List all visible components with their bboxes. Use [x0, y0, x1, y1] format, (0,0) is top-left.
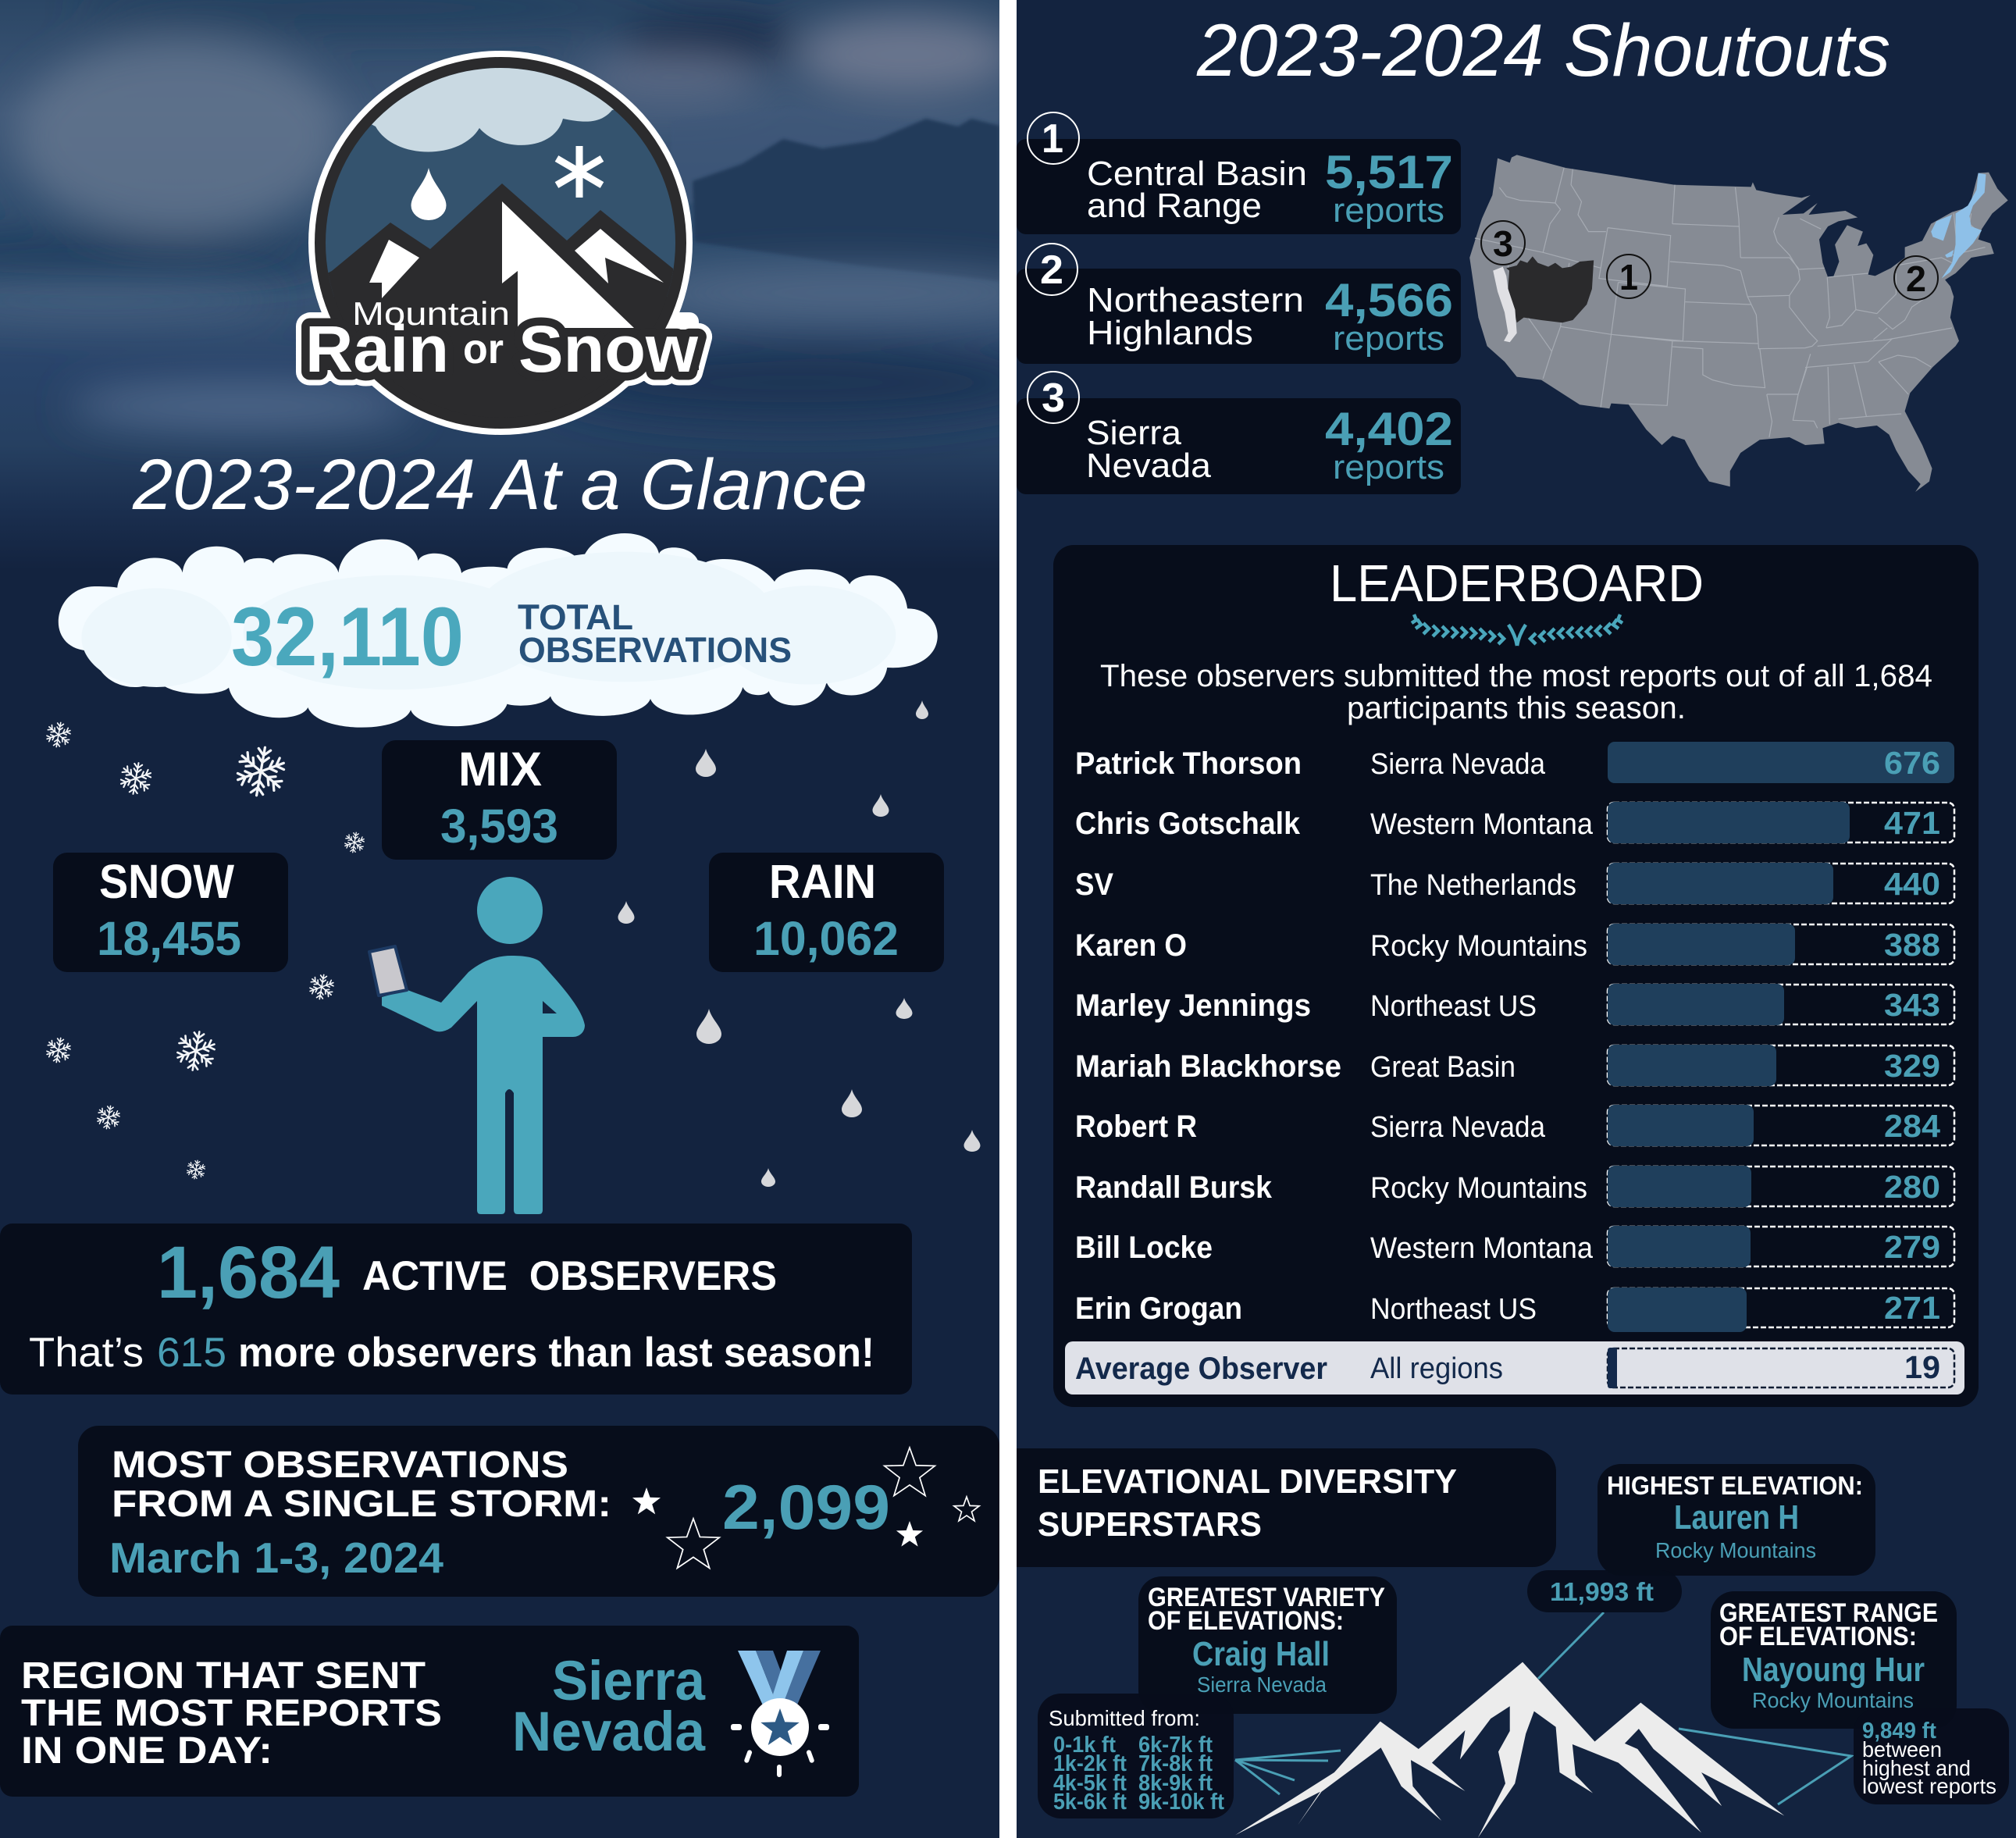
row: Erin Grogan: Erin Grogan — [1075, 1291, 1242, 1326]
callout: greatest variety of elevations — [1138, 1576, 1397, 1714]
stat box: snow — [53, 853, 288, 972]
shoutout 1: Central Basin and Range: reports — [1333, 191, 1444, 230]
shoutout 3: Sierra Nevada: reports — [1333, 448, 1444, 486]
row: Chris Gotschalk — [1075, 802, 1954, 843]
icon: observer with phone — [369, 877, 585, 1214]
logo: Mountain Rain or Snow: Snow — [518, 312, 699, 386]
row: Randall Bursk: Rocky Mountains — [1370, 1172, 1587, 1205]
region name: Nevada — [512, 1701, 705, 1763]
callout: greatest variety of elevations: Sierra Nevada — [1197, 1672, 1327, 1697]
shoutout 1: Central Basin and Range: Central Basin — [1087, 155, 1307, 193]
panel: region with most reports in one day — [0, 1626, 859, 1797]
logo: Mountain Rain or Snow: Rain — [305, 312, 449, 386]
callout: highest elevation: Rocky Mountains — [1655, 1538, 1816, 1562]
leaderboard heading: LEADERBOARD — [1330, 554, 1704, 613]
callout: greatest variety of elevations: GREATEST VARIETY — [1148, 1583, 1385, 1612]
icon: laurel — [1412, 614, 1622, 646]
callout: 11,993 ft: 11,993 ft — [1550, 1577, 1654, 1606]
icon: snowy mountain range — [1235, 1662, 1784, 1838]
callout: submitted from elevations: 1k-2k ft — [1053, 1751, 1127, 1776]
row: Randall Bursk — [1075, 1166, 1954, 1207]
total number: 32,110 — [231, 590, 464, 683]
row: Karen O: 388 — [1884, 927, 1940, 963]
region heading: THE MOST REPORTS — [21, 1693, 442, 1734]
callout: submitted from elevations: 0-1k ft — [1053, 1733, 1116, 1758]
storm heading — [112, 1444, 611, 1525]
stat box: mix — [382, 740, 617, 860]
map marker 3: 3 — [1493, 223, 1513, 264]
row: Robert R: 284 — [1884, 1108, 1940, 1144]
callout: 11,993 ft — [1527, 1570, 1682, 1612]
row: Karen O: Karen O — [1075, 928, 1187, 963]
snowflakes — [45, 721, 366, 1181]
row: Erin Grogan: Northeast US — [1370, 1293, 1537, 1326]
callout: submitted from elevations: 6k-7k ft — [1138, 1733, 1213, 1758]
stat box: rain — [709, 853, 944, 972]
callout: submitted from elevations: 7k-8k ft — [1138, 1751, 1213, 1776]
cloud: total observations — [59, 533, 938, 728]
callout: greatest range of elevations: Rocky Mountains — [1752, 1688, 1914, 1712]
right panel: shoutouts — [992, 0, 2016, 1838]
row: Average Observer — [1065, 1341, 1964, 1395]
row: Mariah Blackhorse — [1075, 1045, 1954, 1086]
total label: TOTAL — [518, 597, 633, 637]
panel: elevational diversity superstars: SUPERSTARS — [1038, 1505, 1262, 1544]
map marker 2: 2 — [1906, 258, 1926, 299]
row: Mariah Blackhorse: Great Basin — [1370, 1051, 1516, 1084]
map marker 1: 1 — [1619, 257, 1638, 297]
panel: active observers — [0, 1224, 912, 1395]
storm heading: MOST OBSERVATIONS — [112, 1444, 568, 1486]
callout: submitted from elevations: 9k-10k ft — [1138, 1790, 1224, 1815]
shoutout 2: Northeastern Highlands: reports — [1333, 319, 1444, 358]
row: Chris Gotschalk: 471 — [1884, 805, 1940, 841]
shoutout 2: Northeastern Highlands: Northeastern — [1087, 281, 1304, 319]
stat box: rain: RAIN — [769, 855, 876, 908]
stat box: mix: 3,593 — [440, 800, 558, 853]
row: SV: 440 — [1884, 866, 1940, 902]
row: Karen O — [1075, 924, 1954, 965]
callout: 9,849 ft: lowest reports — [1862, 1774, 1996, 1798]
map marker 1 — [1607, 255, 1651, 298]
panel: elevational diversity superstars: ELEVATIONAL DIVERSITY — [1038, 1462, 1457, 1501]
callout: greatest variety of elevations: OF ELEVATIONS: — [1148, 1606, 1344, 1636]
callout: submitted from elevations: 5k-6k ft — [1053, 1790, 1127, 1815]
row: Robert R: Sierra Nevada — [1370, 1111, 1546, 1144]
photo background: stormy mountains — [0, 0, 999, 539]
row: Patrick Thorson: Patrick Thorson — [1075, 746, 1302, 781]
comparison sentence: 615 — [157, 1330, 226, 1376]
callout: greatest range of elevations: OF ELEVATIONS: — [1719, 1622, 1917, 1651]
observers count: 1,684 — [157, 1231, 340, 1314]
map marker 2 — [1894, 256, 1938, 300]
shoutout 3: Sierra Nevada: Sierra — [1086, 414, 1182, 452]
callout: 9,849 ft: between — [1862, 1737, 1942, 1761]
row: Patrick Thorson — [1075, 742, 1954, 783]
row: Average Observer: 19 — [1904, 1349, 1940, 1385]
observers label: ACTIVE OBSERVERS — [362, 1253, 777, 1299]
left panel: at a glance — [0, 0, 1054, 1838]
region heading: REGION THAT SENT — [21, 1655, 426, 1697]
row: Bill Locke — [1075, 1226, 1954, 1267]
row: Marley Jennings: Northeast US — [1370, 990, 1537, 1023]
leaderboard intro — [1100, 659, 1932, 725]
leaderboard intro: participants this season. — [1347, 691, 1686, 725]
icon: stars — [632, 1448, 979, 1568]
storm count: 2,099 — [722, 1473, 890, 1543]
title: 2023-2024 At a Glance: 2023-2024 At a Glance — [132, 445, 867, 525]
shoutout 3: Sierra Nevada: 3 — [1042, 376, 1065, 421]
stat box: rain: 10,062 — [753, 912, 899, 965]
comparison sentence: more observers than last season! — [238, 1330, 874, 1376]
callout: highest elevation — [1597, 1464, 1875, 1576]
row: Randall Bursk: 280 — [1884, 1169, 1940, 1205]
logo: Mountain Rain or Snow: Mountain — [352, 295, 510, 332]
shoutout 1: Central Basin and Range: 5,517 — [1325, 146, 1453, 198]
panel: elevational diversity superstars — [992, 1448, 1556, 1567]
row: Marley Jennings — [1075, 984, 1954, 1025]
map: United States with top regions — [1469, 155, 2008, 492]
callout: highest elevation: HIGHEST ELEVATION: — [1607, 1471, 1863, 1500]
region heading: IN ONE DAY: — [21, 1730, 272, 1772]
callout: submitted from elevations — [1038, 1694, 1234, 1818]
row: Chris Gotschalk: Chris Gotschalk — [1075, 807, 1301, 841]
row: Chris Gotschalk: Western Montana — [1370, 808, 1594, 841]
callout: greatest range of elevations: Nayoung Hur — [1742, 1651, 1925, 1689]
callout: greatest variety of elevations: Craig Hall — [1192, 1635, 1330, 1673]
raindrops — [618, 700, 981, 1187]
row: Erin Grogan — [1075, 1288, 1954, 1332]
row: Marley Jennings: 343 — [1884, 987, 1940, 1023]
logo: Mountain Rain or Snow: Snow — [518, 312, 699, 386]
callout: greatest range of elevations — [1711, 1591, 1957, 1729]
row: Robert R: Robert R — [1075, 1110, 1197, 1144]
row: Average Observer: All regions — [1370, 1352, 1503, 1385]
callout: submitted from elevations: 4k-5k ft — [1053, 1771, 1127, 1796]
stat box: snow: 18,455 — [97, 912, 241, 965]
leaderboard intro: These observers submitted the most reports out of all 1,684 — [1100, 659, 1932, 693]
connector lines — [1235, 1612, 1851, 1804]
shoutout 3: Sierra Nevada: 4,402 — [1325, 403, 1453, 455]
shoutout 1: Central Basin and Range — [1017, 112, 1461, 234]
shoutout 3: Sierra Nevada: Nevada — [1086, 447, 1212, 485]
row: Mariah Blackhorse: 329 — [1884, 1048, 1940, 1084]
callout: 9,849 ft: highest and — [1862, 1756, 1971, 1780]
map marker 3 — [1481, 221, 1525, 265]
row: Patrick Thorson: 676 — [1884, 745, 1940, 781]
shoutout 2: Northeastern Highlands — [1017, 244, 1461, 364]
row: Average Observer: Average Observer — [1075, 1352, 1327, 1386]
region name — [512, 1651, 705, 1763]
row: Erin Grogan: 271 — [1884, 1290, 1940, 1326]
total label — [518, 597, 792, 670]
row: Bill Locke: Bill Locke — [1075, 1231, 1213, 1265]
logo: Mountain Rain or Snow: or — [463, 326, 504, 372]
row: Robert R — [1075, 1105, 1954, 1146]
logo: Mountain Rain or Snow: Rain — [305, 312, 449, 386]
row: SV — [1075, 863, 1954, 904]
row: Marley Jennings: Marley Jennings — [1075, 988, 1311, 1023]
callout: 9,849 ft — [1854, 1708, 2009, 1804]
row: Bill Locke: Western Montana — [1370, 1232, 1594, 1265]
stat box: mix: MIX — [458, 743, 542, 796]
logo: Mountain Rain or Snow: Rain — [305, 312, 449, 386]
total label: OBSERVATIONS — [518, 630, 792, 670]
row: Randall Bursk: Randall Bursk — [1075, 1170, 1273, 1205]
shoutout 2: Northeastern Highlands: 4,566 — [1325, 274, 1453, 326]
row: Patrick Thorson: Sierra Nevada — [1370, 748, 1546, 781]
row: Bill Locke: 279 — [1884, 1229, 1940, 1265]
stat box: snow: SNOW — [99, 855, 234, 908]
region name: Sierra — [552, 1651, 705, 1712]
region heading — [21, 1655, 442, 1772]
logo: Mountain Rain or Snow — [301, 51, 699, 468]
callout: highest elevation: Lauren H — [1674, 1498, 1799, 1537]
storm heading: FROM A SINGLE STORM: — [112, 1484, 611, 1525]
shoutout 2: Northeastern Highlands: 2 — [1040, 248, 1063, 293]
callout: submitted from elevations: 8k-9k ft — [1138, 1771, 1213, 1796]
row: Karen O: Rocky Mountains — [1370, 930, 1587, 963]
logo: Mountain Rain or Snow: Snow — [518, 312, 699, 386]
icon: medal — [731, 1651, 829, 1777]
comparison sentence: That’s — [29, 1330, 144, 1376]
row: SV: The Netherlands — [1370, 869, 1576, 902]
shoutout 1: Central Basin and Range: and Range — [1087, 187, 1262, 225]
title: 2023-2024 Shoutouts: 2023-2024 Shoutouts — [1196, 9, 1890, 92]
shoutout 3: Sierra Nevada — [1017, 372, 1461, 494]
callout: greatest range of elevations: GREATEST RANGE — [1719, 1598, 1938, 1628]
callout: submitted from elevations: Submitted from: — [1049, 1706, 1200, 1730]
shoutout 1: Central Basin and Range: 1 — [1042, 116, 1063, 162]
shoutout 2: Northeastern Highlands: Highlands — [1087, 314, 1253, 352]
panel: leaderboard — [1053, 545, 1979, 1407]
callout: 9,849 ft: 9,849 ft — [1862, 1719, 1936, 1744]
panel: most observations from a single storm — [78, 1426, 999, 1597]
row: Mariah Blackhorse: Mariah Blackhorse — [1075, 1049, 1341, 1084]
storm date: March 1-3, 2024 — [109, 1533, 443, 1582]
row: SV: SV — [1075, 867, 1113, 902]
